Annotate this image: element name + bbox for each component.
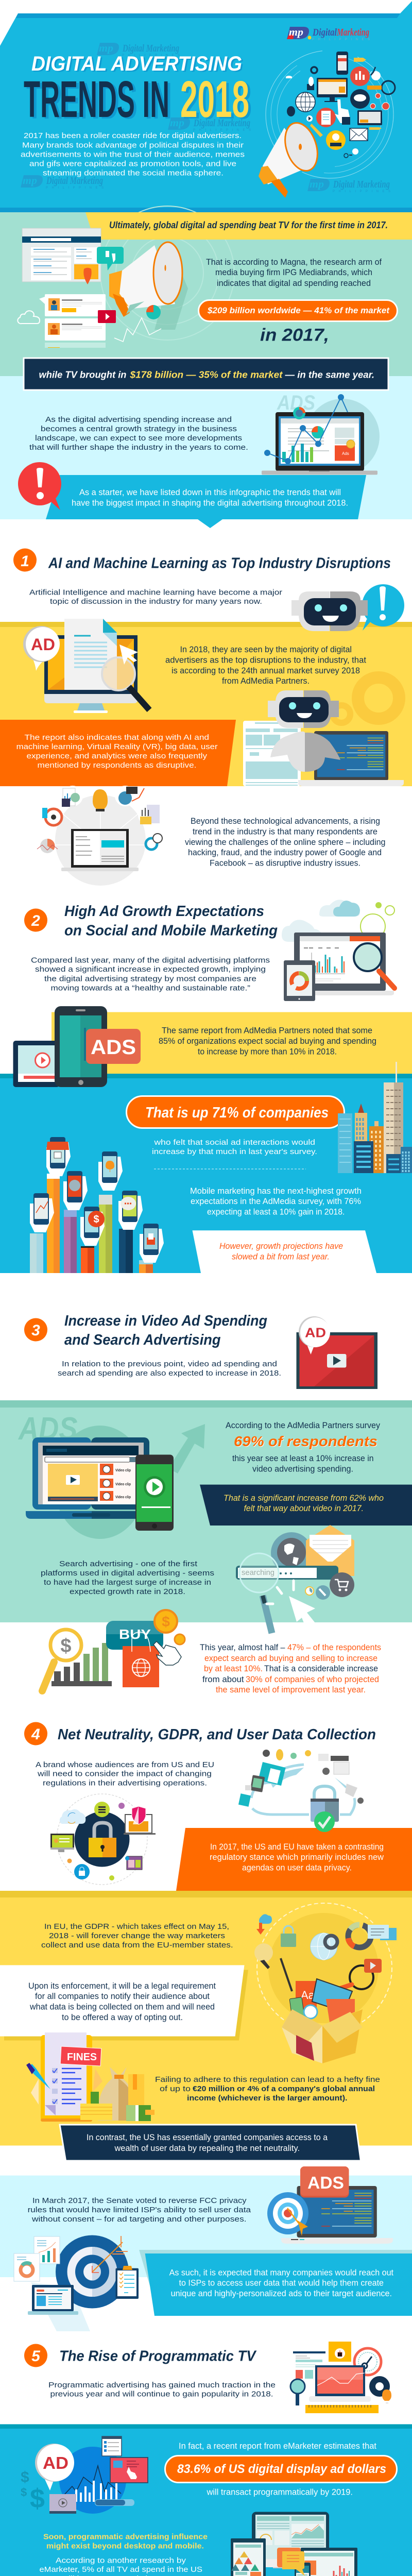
icon: city skyline [338, 1062, 412, 1173]
text: 47 percent: 47% – of the respondents [287, 1643, 381, 1652]
text: relation: In relation to the previous point, video ad spending and [62, 1360, 277, 1368]
callout: slowed growth: slowed a bit from last year. [232, 1252, 330, 1262]
icon: laptop and phone with video [26, 1424, 205, 1539]
number badge 2 [24, 909, 47, 931]
text: 47 percent [200, 1643, 381, 1694]
text: regulation: regulations in their advertising operations. [43, 1778, 207, 1787]
text: 47 percent: 30% of companies of who projected [246, 1675, 379, 1684]
icon: laptop with charts: ADS [277, 392, 315, 414]
text: admedia report: 85% of organizations expect social ad buying and spending [159, 1037, 376, 1046]
text: magna report: indicates that digital ad spending reached [217, 279, 371, 288]
text: fine amount: Failing to adhere to this regulation can lead to a hefty fine [155, 2075, 380, 2084]
title: 2018 [180, 71, 249, 128]
text: last year [152, 1138, 317, 1156]
callout: tv market: — in the same year. [284, 370, 374, 380]
text: mobile marketing: expectations in the AdMedia survey, with 76% [191, 1197, 361, 1206]
text: search advertising: platforms used in digital advertising - seems [41, 1569, 214, 1578]
icon: quote bubble [97, 247, 124, 270]
number badge 5: 5 [31, 2348, 41, 2365]
text: mobile marketing: Mobile marketing has the next-highest growth [190, 1187, 362, 1196]
number badge 1 [13, 548, 37, 572]
intro text: and gifs were capitalized as promotion tools, and live [29, 159, 236, 168]
icon: cloud outline [18, 311, 40, 324]
watermark logo [307, 179, 390, 193]
heading [64, 903, 278, 939]
intro text: advertisements to win the trust of their audience, memes [21, 150, 245, 159]
watermark logo: PHILIPPINES [46, 187, 104, 190]
callout pill [127, 1096, 344, 1128]
icon: multi-screen devices [231, 2512, 365, 2576]
panel: section 2 social and mobile [0, 900, 412, 1273]
watermark logo: PHILIPPINES [333, 190, 390, 193]
icon: target with documents [14, 2235, 139, 2331]
icon: tablet and phone with ads: ADS [91, 1036, 136, 1059]
text: 47 percent: expect search ad buying and selling to increase [204, 1654, 377, 1663]
callout: personalized ads: to ISPs to access user data that would help them create [179, 2279, 384, 2288]
text: search advertising: to have had the largest surge of increase in [44, 1578, 211, 1587]
mint band [0, 1400, 412, 1622]
number badge 4: 4 [31, 1726, 40, 1743]
panel: section 1 AI and machine learning [0, 548, 412, 886]
intro text [21, 131, 245, 178]
text: gdpr: 2018 - will forever change the way marketers [49, 1931, 225, 1940]
panel: spending comparison [0, 206, 412, 528]
callout: legal requirement: what data is being collected on them and will need [29, 2002, 215, 2011]
callout: legal requirement: for all companies to notify their audience about [35, 1992, 210, 2001]
heading: High Ad Growth Expectations [64, 903, 264, 920]
text: growth [31, 956, 270, 993]
icon: tablet and phone with ads [13, 1006, 141, 1087]
text: last year: who felt that social ad interactions would [153, 1138, 315, 1147]
callout: personalized ads [139, 2250, 412, 2316]
text: relation [58, 1360, 281, 1378]
icon: green check [314, 1811, 335, 1832]
yellow band [0, 1891, 412, 2145]
text: challenges: Beyond these technological advancements, a rising [191, 817, 380, 826]
number badge 5 [24, 2344, 47, 2367]
text: fine amount: €20 million or 4% of a company's global annual [193, 2084, 375, 2093]
text: 69 percent: 69% of respondents [234, 1433, 377, 1449]
icon: business ideas dome [37, 786, 162, 886]
callout: 62 percent: felt that way about video in 2017. [244, 1504, 364, 1513]
text: relation: search ad spending are also expected to increase in 2018. [58, 1369, 281, 1378]
callout: legal requirement [0, 1965, 248, 2040]
panel: section 3 video and search [0, 1313, 412, 1694]
callout: slowed growth: However, growth projections have [219, 1242, 343, 1251]
blue band [0, 2424, 412, 2576]
orange callout: machine learning, Virtual Reality (VR), big data, user [16, 742, 218, 751]
watermark logo: mp [99, 43, 113, 54]
icon: browser window [22, 228, 101, 284]
text: gdpr [41, 1922, 233, 1950]
text: 69 percent: According to the AdMedia Partners survey [226, 1421, 381, 1430]
callout: starter [46, 475, 366, 528]
text: 47 percent: by at least 10%. [204, 1664, 263, 1673]
text: growth: the digital advertising strategy by most companies are [44, 975, 256, 983]
callout: us contrast: wealth of user data by repealing the net neutrality. [114, 2144, 300, 2153]
orange callout [176, 1828, 412, 1891]
text: magna report: That is according to Magna, the research arm of [206, 258, 382, 267]
text: intro: topic of discussion in the industry for many years now. [50, 597, 262, 606]
icon: raised hands with phones [30, 1137, 164, 1273]
text: challenges: viewing the challenges of the online sphere – including [185, 838, 385, 847]
text: programmatic [48, 2381, 276, 2399]
text: 69 percent: video advertising spending. [252, 1464, 353, 1473]
title: DIGITAL ADVERTISING [31, 53, 242, 75]
number badge 2: 2 [31, 912, 40, 929]
watermark logo [97, 43, 180, 57]
icon: search bar illustration [236, 1525, 354, 1633]
watermark logo: PHILIPPINES [193, 129, 251, 132]
logo: Marketing [336, 27, 369, 38]
yellow banner: Ultimately, global digital ad spending beat TV for the first time in 2017. [109, 220, 388, 230]
callout: 62 percent: That is a significant increase from 62% who [224, 1494, 384, 1503]
icon: browser and laptop with robot [243, 690, 404, 786]
text: magna report [206, 258, 382, 288]
icon: digital box illustration: Aa [301, 1989, 315, 2002]
callout: 62 percent [200, 1485, 412, 1526]
icon: laptop with charts [262, 392, 380, 475]
icon: search bar illustration: searching [242, 1568, 274, 1577]
icon: laptop and phone with video: Video clip [115, 1496, 131, 1499]
callout: personalized ads: As such, it is expected that many companies would reach out [169, 2268, 393, 2277]
callout: tv market: $178 billion — 35% of the market [129, 370, 283, 380]
title: TRENDS IN [24, 71, 169, 128]
orange callout: In 2017, the US and EU have taken a contrasting [210, 1842, 384, 1852]
text: mobile marketing [190, 1187, 362, 1217]
text: last year: increase by that much in last year's survey. [152, 1147, 317, 1156]
text: growth strategy: becomes a central growth strategy in the business [41, 425, 237, 433]
text: survey [165, 645, 366, 686]
text: growth strategy: landscape, we can expect to see more developments [35, 434, 242, 443]
watermark logo: mp [310, 179, 324, 190]
text: intro [29, 588, 282, 606]
callout: slowed growth [193, 1230, 376, 1273]
text: survey: In 2018, they are seen by the majority of digital [180, 645, 352, 654]
text: challenges: trend in the industry is that many respondents are [193, 827, 377, 837]
icon: fines clipboard [26, 2032, 154, 2122]
watermark logo: mp [170, 117, 184, 129]
intro text: Many brands took advantage of political disputes in their [22, 141, 244, 149]
text: senate [28, 2196, 251, 2224]
panel: section 5 programmatic tv [0, 2342, 412, 2576]
callout: starter: As a starter, we have listed down in this infographic the trends that will [79, 488, 341, 497]
heading: The Rise of Programmatic TV [59, 2348, 257, 2365]
text: survey: advertisers as the top disruptions to the industry, that [165, 655, 366, 665]
text: 69 percent [226, 1421, 381, 1473]
icon: dashboard tools [290, 2342, 391, 2413]
number badge 3 [24, 1318, 47, 1342]
heading: Net Neutrality, GDPR, and User Data Collection [58, 1726, 376, 1743]
watermark logo [168, 117, 251, 132]
decorative megaphone rings [100, 206, 234, 340]
orange callout: The report also indicates that along with AI and [25, 733, 209, 742]
text: magna report: media buying firm IPG Mediabrands, which [215, 268, 372, 277]
watermark logo: mp [23, 175, 37, 187]
text: senate: without consent – for ad targeting and other purposes. [31, 2215, 247, 2224]
callout pill: 83.6% of US digital display ad dollars [177, 2462, 386, 2476]
text: survey: is according to the 24th annual market survey 2018 [171, 666, 360, 675]
text: senate: rules that would have limited ISP's ability to sell user data [28, 2206, 251, 2214]
text: emarketer report: In fact, a recent report from eMarketer estimates that [179, 2442, 376, 2451]
icon: programmatic ad dashboard [21, 2436, 148, 2514]
intro text: streaming dominated the social media sphere. [43, 169, 224, 178]
text: beyond desktop: might exist beyond desktop and mobile. [46, 2541, 204, 2550]
heading: Increase in Video Ad Spending [64, 1313, 267, 1329]
text: growth strategy: As the digital advertising spending increase and [45, 415, 232, 424]
orange callout: regulatory stance which primarily includes new [210, 1853, 384, 1862]
text: fine amount: income (whichever is the larger amount). [187, 2094, 347, 2103]
text: intro: Artificial Intelligence and machine learning have become a major [29, 588, 282, 597]
icon: video player: AD [305, 1325, 326, 1341]
text: search advertising: expected growth rate in 2018. [70, 1587, 185, 1596]
callout: us contrast [60, 2125, 360, 2161]
number badge 3: 3 [31, 1322, 40, 1339]
text: beyond desktop: eMarketer, 5% of all TV ad spend in the US [39, 2565, 202, 2574]
icon: pie chart [146, 305, 161, 319]
icon cluster: digital marketing icons [266, 50, 395, 178]
icon: buy button with chart: $ [60, 1635, 72, 1657]
icon: monitor with document [23, 619, 149, 713]
text: fine amount: of up to [160, 2084, 191, 2093]
text: programmatic: Programmatic advertising has gained much traction in the [48, 2381, 276, 2389]
text: gdpr: In EU, the GDPR - which takes effect on May 15, [44, 1922, 229, 1931]
icon: raised hands with phones: $ [93, 1214, 99, 1225]
text: search advertising [41, 1560, 214, 1596]
text: admedia report [159, 1026, 376, 1057]
icon: exclamation bubble [18, 462, 61, 510]
icon: programmatic ad dashboard: $ [21, 2486, 27, 2499]
icon: laptop analytics [282, 900, 394, 1001]
panel: section 4 net neutrality and gdpr [0, 1722, 412, 2331]
callout: us contrast: In contrast, the US has essentially granted companies access to a [87, 2133, 328, 2142]
text: regulation: A brand whose audiences are from US and EU [36, 1760, 214, 1769]
icon: ads laptop and target [267, 2166, 393, 2244]
icon: fines clipboard: FINES [67, 2052, 97, 2063]
callout pill: That is up 71% of companies [145, 1105, 329, 1121]
watermark logo: Digital Marketing [46, 175, 103, 187]
text: growth: Compared last year, many of the digital advertising platforms [31, 956, 270, 964]
callout pill: $209 billion worldwide — 41% of the market [207, 306, 390, 315]
icon: buy button with chart: $ [162, 1614, 170, 1630]
text: programmatic: previous year and will continue to gain popularity in 2018. [50, 2390, 273, 2399]
title [24, 53, 249, 128]
orange callout [0, 720, 236, 786]
watermark logo [21, 175, 104, 190]
icon: social posts [39, 294, 116, 348]
icon: data cloud with lock [238, 1749, 364, 1822]
callout pill [165, 2455, 397, 2482]
icon: programmatic ad dashboard: $ [21, 2469, 29, 2486]
cyan band [0, 2176, 412, 2277]
yellow panel [0, 622, 412, 786]
text: fine amount [155, 2075, 380, 2103]
callout: tv market: while TV brought in [39, 370, 127, 380]
text: challenges: Facebook – as disruptive industry issues. [210, 858, 360, 868]
orange callout: agendas on user data privacy. [242, 1863, 352, 1872]
heading: and Search Advertising [64, 1332, 221, 1348]
text: admedia report: to increase by more than 10% in 2018. [198, 1047, 337, 1057]
text: in 2017: in 2017, [260, 326, 329, 345]
logo: mp [289, 27, 303, 38]
icon: monitor with document: AD [31, 635, 55, 654]
callout: legal requirement: to be offered a way of opting out. [62, 2013, 183, 2022]
callout: tv market [24, 358, 388, 390]
text: regulation [36, 1760, 214, 1787]
text: challenges [185, 817, 385, 868]
orange callout: mentioned by respondents as disruptive. [37, 761, 197, 770]
watermark logo: PHILIPPINES [122, 54, 180, 57]
logo: Digital [312, 27, 337, 38]
icon: ads laptop and target: ADS [307, 2173, 344, 2192]
text: 47 percent: the same level of improvement last year. [216, 1685, 366, 1694]
callout pill [199, 300, 398, 321]
heading [64, 1313, 267, 1348]
icon: video player [297, 1316, 377, 1389]
text: 47 percent: from about [202, 1675, 244, 1684]
text: challenges: hacking, fraud, and the industry power of Google and [188, 848, 382, 857]
number badge 4 [24, 1722, 47, 1745]
text: beyond desktop: Soon, programmatic advertising influence [43, 2533, 208, 2541]
text: growth: moving towards at a “healthy and sustainable rate.” [50, 984, 250, 993]
watermark logo: Digital Marketing [122, 43, 179, 54]
icon: robot with exclamation [291, 584, 404, 631]
text: gdpr: collect and use data from the EU-member states. [41, 1941, 233, 1950]
callout: starter: have the biggest impact in shaping the digital advertising throughout 2018. [72, 499, 348, 508]
heading: on Social and Mobile Marketing [64, 922, 278, 939]
text: survey: from AdMedia Partners. [222, 676, 310, 686]
icon: buy button with chart [42, 1610, 185, 1691]
icon: security lock ring [50, 1794, 156, 1885]
yellow and blue band [0, 1012, 412, 1273]
icon: megaphone [109, 242, 188, 330]
text: ads watermark: ADS [18, 1411, 77, 1447]
text: growth strategy [29, 415, 248, 452]
icon: buy button with chart: BUY [119, 1626, 151, 1642]
text: senate: In March 2017, the Senate voted to reverse FCC privacy [32, 2196, 247, 2205]
logo: PHILIPPINES [312, 38, 370, 41]
logo [287, 27, 370, 41]
text: search advertising: Search advertising - one of the first [59, 1560, 198, 1568]
text: beyond desktop: According to another research by [56, 2556, 186, 2565]
text: growth strategy: that will further shape the industry in the years to come. [29, 443, 248, 452]
watermark logo: Digital Marketing [333, 179, 390, 190]
icon: laptop and phone with video: Video clip [115, 1469, 131, 1472]
orange callout: experience, and analytics were also frequently [27, 752, 208, 760]
icon: digital box illustration [254, 1903, 397, 2063]
icon: programmatic ad dashboard: AD [43, 2453, 68, 2472]
text: growth: showed a significant increase in expected growth, implying [35, 965, 266, 974]
icon: laptop and phone with video: Video clip [115, 1483, 131, 1486]
text: 47 percent: This year, almost half – [200, 1643, 285, 1652]
text: 47 percent: That is a considerable increase [264, 1664, 378, 1673]
icon: laptop with charts: Ads [342, 451, 349, 456]
text: admedia report: The same report from AdMedia Partners noted that some [162, 1026, 372, 1036]
text: beyond desktop [39, 2533, 208, 2576]
text: 69 percent: this year see at least a 10% increase in [232, 1454, 374, 1463]
yellow banner [85, 212, 412, 240]
intro text: 2017 has been a roller coaster ride for digital advertisers. [24, 131, 242, 140]
text: programmatically: will transact programmatically by 2019. [207, 2487, 353, 2497]
text: mobile marketing: expecting at least a 10% gain in 2018. [207, 1208, 345, 1217]
icon: megaphone [259, 118, 323, 198]
callout: legal requirement: Upon its enforcement, it will be a legal requirement [28, 1981, 216, 1991]
callout: personalized ads: unique and highly-personalized ads to their target audience. [171, 2289, 392, 2298]
panel: header [0, 0, 412, 212]
number badge 1: 1 [21, 553, 29, 570]
icon: line chart [114, 318, 161, 342]
icon: programmatic ad dashboard: $ [30, 2484, 45, 2514]
text: regulation: will need to consider the impact of changing [37, 1770, 212, 1778]
watermark logo: Digital Marketing [193, 117, 250, 129]
